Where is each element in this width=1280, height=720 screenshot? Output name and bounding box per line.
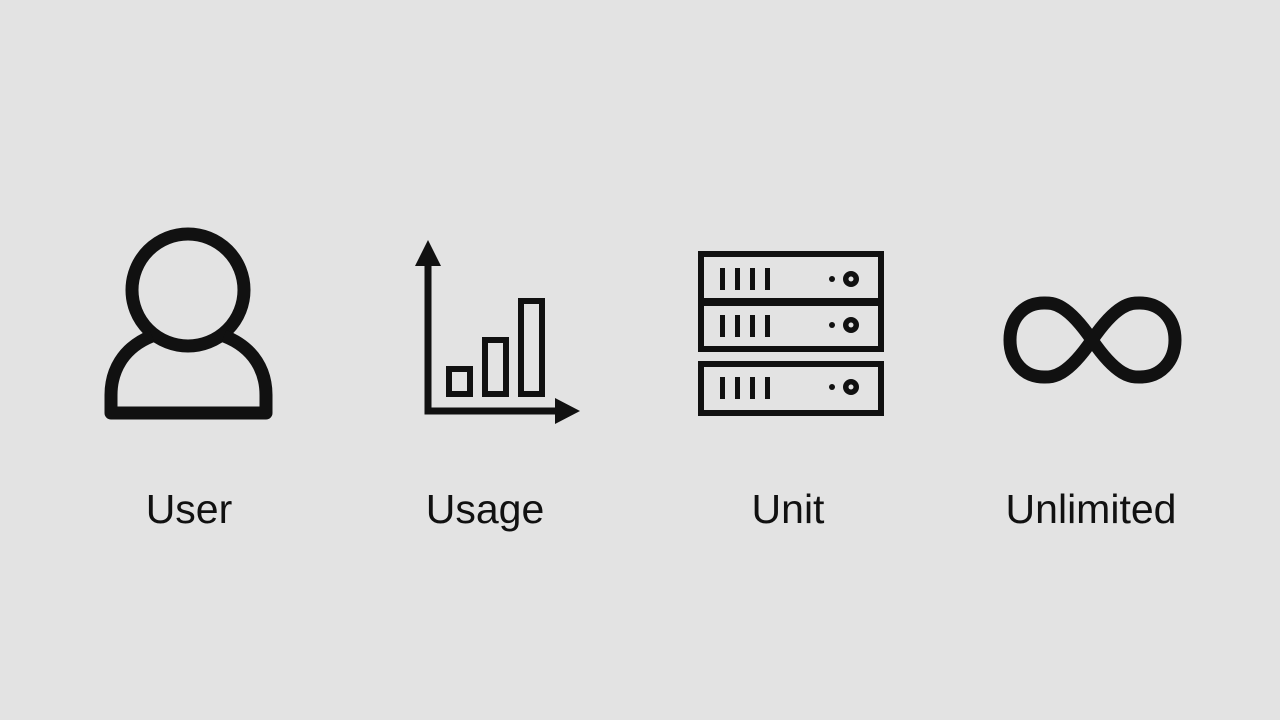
icon: infinity	[1010, 303, 1175, 377]
icon: usage chart	[415, 240, 580, 424]
icon: server unit	[701, 254, 881, 413]
icon: user	[111, 234, 266, 413]
label: Unlimited: Unlimited	[1006, 486, 1176, 532]
label: Usage: Usage	[426, 486, 544, 532]
label: Unit: Unit	[752, 486, 825, 532]
label: User: User	[146, 486, 232, 532]
